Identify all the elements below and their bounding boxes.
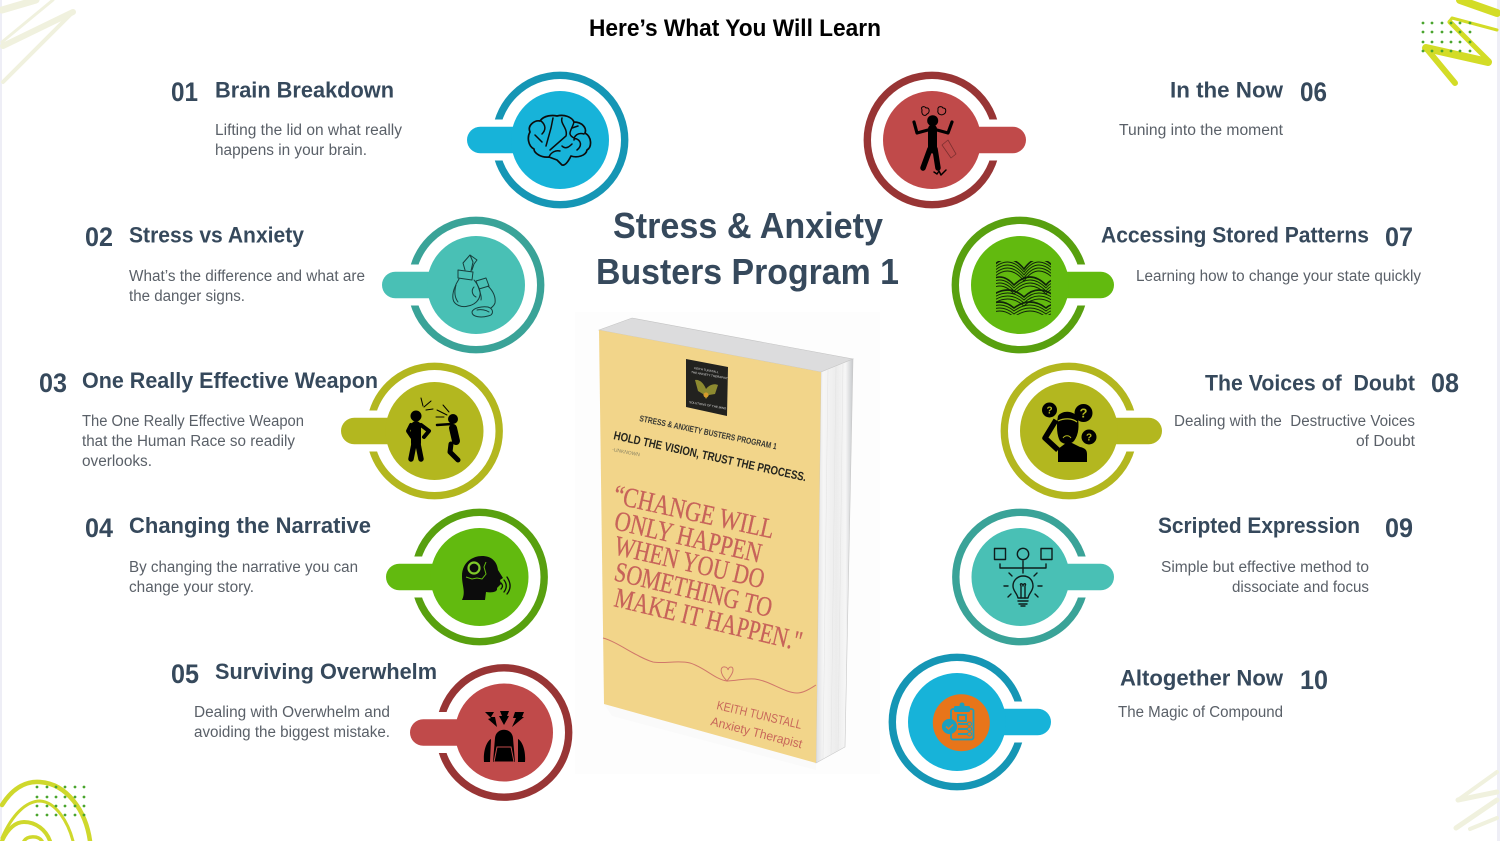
number 07: 07: [1385, 222, 1413, 252]
description 02: [129, 268, 365, 305]
description 04: By changing the narrative you can: [129, 559, 358, 576]
program title: [596, 205, 899, 292]
description 09: [1161, 559, 1369, 596]
number 08: 08: [1431, 368, 1459, 398]
book logo: KEITH TUNSTALL: [694, 366, 719, 374]
item 09: Scripted Expression: [956, 512, 1413, 642]
description 03: [82, 413, 304, 470]
description 10: The Magic of Compound: [1118, 704, 1283, 721]
description 02: What’s the difference and what are: [129, 268, 365, 285]
description 05: avoiding the biggest mistake.: [194, 724, 390, 741]
number 03: 03: [39, 368, 67, 398]
description 08: of Doubt: [1356, 433, 1416, 450]
heading 02: Stress vs Anxiety: [129, 222, 304, 248]
cup icon 05: [410, 668, 569, 797]
item 08: The Voices of Doubt: [1004, 366, 1459, 496]
description 06: Tuning into the moment: [1119, 122, 1284, 139]
description 05: [194, 704, 390, 741]
description 03: that the Human Race so readily: [82, 433, 295, 450]
description 01: Lifting the lid on what really: [215, 122, 402, 139]
page heading: Here’s What You Will Learn: [589, 15, 881, 42]
description 02: the danger signs.: [129, 288, 245, 305]
cup icon 03: [341, 366, 499, 496]
item 10: Altogether Now: [892, 657, 1328, 787]
item 06: In the Now: [867, 75, 1327, 205]
book mockup: [575, 312, 880, 774]
heading 04: Changing the Narrative: [129, 513, 371, 538]
heading 09: Scripted Expression: [1158, 513, 1360, 538]
description 01: [215, 122, 402, 159]
book mockup: Anxiety Therapist: [709, 714, 804, 751]
description 07: Learning how to change your state quickly: [1136, 268, 1421, 285]
book mockup: -UNKNOWN: [612, 447, 641, 458]
cup icon 10: [892, 657, 1051, 787]
cup icon 04: [386, 512, 544, 642]
cup icon 08: ?: [1086, 432, 1092, 444]
dots: top right: [1422, 22, 1471, 52]
cup icon 08: [1004, 366, 1162, 496]
scribble: top left: [2, 0, 73, 82]
book mockup: HOLD THE VISION, TRUST THE PROCESS.: [612, 428, 808, 484]
scribble: bottom right: [1456, 772, 1497, 829]
program title: Stress & Anxiety: [613, 205, 883, 246]
description 01: happens in your brain.: [215, 142, 367, 159]
item 01: Brain Breakdown: [171, 75, 625, 205]
description 09: dissociate and focus: [1232, 579, 1369, 596]
cup icon 08: ?: [1080, 406, 1088, 420]
dots: bottom left: [36, 786, 85, 816]
description 03: The One Really Effective Weapon: [82, 413, 304, 430]
description 03: overlooks.: [82, 453, 152, 470]
book quote: [610, 480, 805, 658]
scribble: top right: [1426, 0, 1497, 83]
number 05: 05: [171, 659, 199, 689]
description 05: Dealing with Overwhelm and: [194, 704, 390, 721]
number 04: 04: [85, 513, 113, 543]
number 02: 02: [85, 222, 113, 252]
heading 08: The Voices of Doubt: [1205, 370, 1415, 396]
description 04: change your story.: [129, 579, 254, 596]
description 09: Simple but effective method to: [1161, 559, 1369, 576]
program title: Busters Program 1: [596, 251, 899, 292]
heading 07: Accessing Stored Patterns: [1101, 222, 1369, 248]
heading 10: Altogether Now: [1120, 666, 1283, 690]
book mockup: STRESS & ANXIETY BUSTERS PROGRAM 1: [639, 413, 778, 451]
item 05: Surviving Overwhelm: [171, 659, 569, 797]
description 08: Dealing with the Destructive Voices: [1174, 413, 1415, 430]
cup icon 02: [382, 220, 541, 350]
item 02: Stress vs Anxiety: [85, 220, 541, 350]
item 07: Accessing Stored Patterns: [955, 220, 1421, 350]
heading 01: Brain Breakdown: [215, 78, 394, 102]
book logo: [686, 359, 728, 416]
book logo: SOLUTIONS OF THE MIND: [689, 400, 727, 411]
book quote: “CHANGE WILL: [610, 480, 777, 545]
item 03: One Really Effective Weapon: [39, 366, 499, 496]
heading 06: In the Now: [1170, 78, 1283, 102]
cup icon 01: [467, 75, 625, 205]
description 08: [1174, 413, 1416, 450]
heading 05: Surviving Overwhelm: [215, 659, 437, 684]
cup icon 07: [955, 220, 1114, 350]
number 06: 06: [1300, 77, 1327, 107]
cup icon 08: ?: [1046, 406, 1053, 416]
heading 03: One Really Effective Weapon: [82, 368, 378, 393]
scribble: bottom left: [2, 782, 90, 841]
book quote: ONLY HAPPEN: [611, 506, 765, 570]
number 01: 01: [171, 77, 198, 107]
number 09: 09: [1385, 513, 1413, 543]
book mockup: KEITH TUNSTALL: [715, 698, 803, 732]
book quote: WHEN YOU DO: [611, 531, 767, 595]
book quote: MAKE IT HAPPEN.": [611, 583, 805, 658]
book logo: THE ANXIETY THERAPIST: [691, 370, 728, 380]
book quote: SOMETHING TO: [611, 557, 775, 624]
number 10: 10: [1300, 665, 1328, 695]
cup icon 09: [956, 512, 1114, 642]
description 04: [129, 559, 358, 596]
cup icon 06: [867, 75, 1026, 205]
item 04: Changing the Narrative: [85, 512, 544, 642]
